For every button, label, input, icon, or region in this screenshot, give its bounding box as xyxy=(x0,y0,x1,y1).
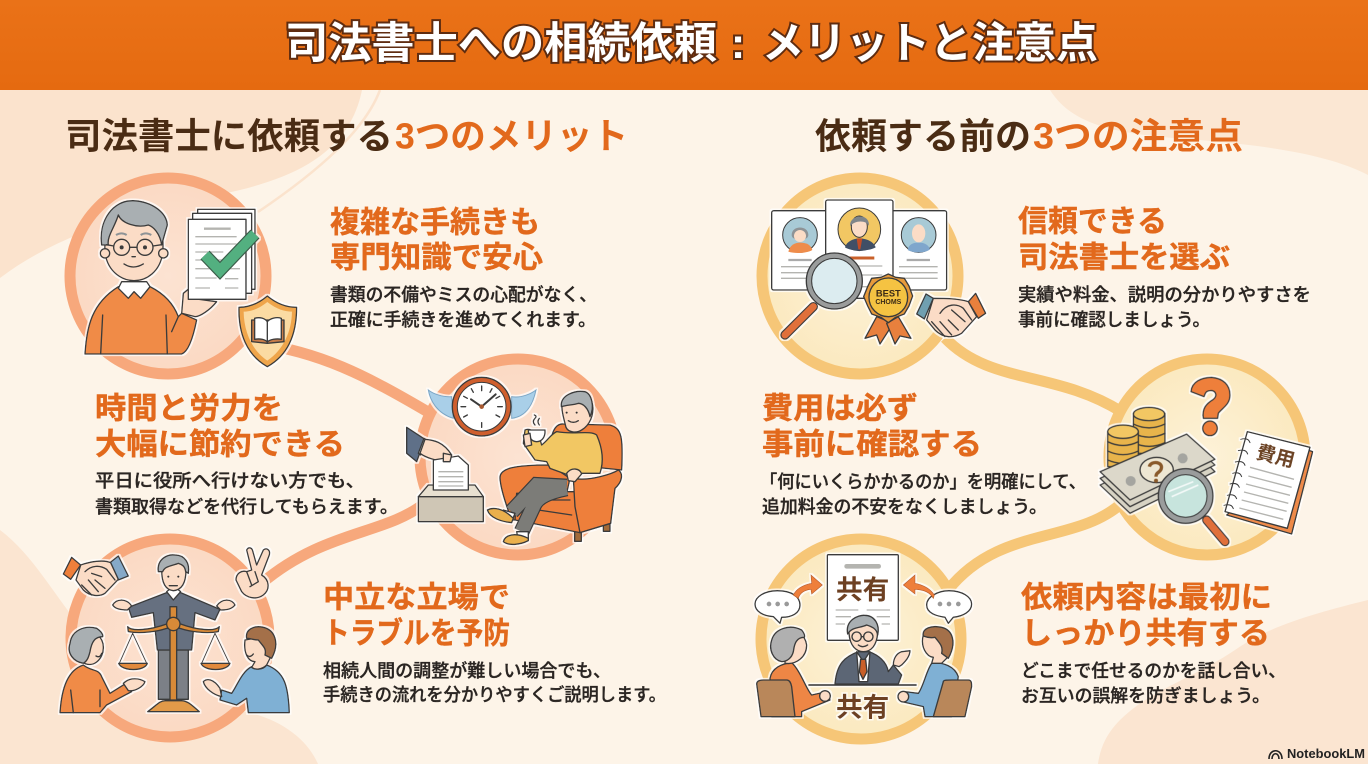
icon: shared document: 共有 xyxy=(836,575,889,605)
heading: merits: 司法書士に依頼する xyxy=(65,116,393,156)
heading: cautions xyxy=(815,116,1243,156)
icon: peace hand xyxy=(236,548,270,598)
table with shared label xyxy=(808,685,917,722)
icon: best choice rosette: BEST xyxy=(876,288,901,298)
icon: woman in orange xyxy=(60,627,145,713)
text: caution 1: 事前に確認しましょう。 xyxy=(1018,310,1210,330)
icon: mediator with scales xyxy=(113,555,235,712)
text: caution 2: 事前に確認する xyxy=(762,428,982,462)
icon: cost notebook xyxy=(1224,432,1313,534)
connector paths right xyxy=(945,338,1122,590)
text: merit 1: 正確に手続きを進めてくれます。 xyxy=(330,310,596,330)
connector paths left xyxy=(255,343,428,583)
text: merit 3: トラブルを予防 xyxy=(323,616,510,650)
panel: caution 2 illustration xyxy=(1100,359,1313,555)
text: caution 1: 実績や料金、説明の分かりやすさを xyxy=(1018,285,1311,305)
text: merit 1: 書類の不備やミスの心配がなく、 xyxy=(330,284,597,305)
text: merit 1 xyxy=(330,206,597,330)
icon: speech bubbles and arrows xyxy=(755,575,972,623)
icon: coin stacks xyxy=(1108,407,1165,467)
title: : xyxy=(731,20,745,68)
text: merit 2 xyxy=(95,392,398,517)
icon: winged clock xyxy=(428,377,536,436)
icon: question mark xyxy=(1191,377,1230,436)
text: caution 2: 追加料金の不安をなくしましょう。 xyxy=(762,497,1047,517)
icon: shield with book xyxy=(239,296,297,367)
text: merit 1: 複雑な手続きも xyxy=(330,206,540,240)
icon: man relaxing in armchair with tea xyxy=(487,391,622,544)
heading: cautions: 3つの注意点 xyxy=(1033,116,1243,156)
text: merit 2: 平日に役所へ行けない方でも、 xyxy=(95,471,365,491)
text: caution 3 xyxy=(1021,582,1286,706)
title: メリットと注意点 xyxy=(762,20,1098,68)
panel: caution 3 illustration xyxy=(755,539,972,739)
heading: merits: 3つのメリット xyxy=(395,116,628,156)
icon: magnifying glass over cash xyxy=(1158,469,1225,542)
text: caution 1: 司法書士を選ぶ xyxy=(1018,242,1230,274)
table with shared label: 共有 xyxy=(836,692,889,722)
heading: merits xyxy=(65,116,628,156)
text: merit 1: 専門知識で安心 xyxy=(330,242,543,274)
icon: handshake xyxy=(917,293,986,337)
heading: cautions: 依頼する前の xyxy=(815,116,1031,156)
icon: banknotes xyxy=(1100,434,1215,513)
text: merit 3: 相続人間の調整が難しい場合でも、 xyxy=(323,660,611,681)
text: caution 1 xyxy=(1018,206,1311,330)
text: caution 2 xyxy=(760,392,1086,517)
icon: shared document xyxy=(827,555,898,640)
icon: advisor in suit xyxy=(835,615,910,684)
title xyxy=(285,20,1098,68)
text: merit 2: 書類取得などを代行してもらえます。 xyxy=(95,497,398,517)
text: caution 2: 費用は必ず xyxy=(762,392,918,426)
text: merit 3: 手続きの流れを分かりやすくご説明します。 xyxy=(323,685,666,705)
panel: caution 1 illustration xyxy=(762,178,986,374)
text: caution 3: 依頼内容は最初に xyxy=(1021,582,1272,614)
icon: cost notebook: 費用 xyxy=(1254,441,1297,472)
panel: merit 3 illustration xyxy=(60,539,289,737)
panel: merit 2 illustration xyxy=(407,359,622,555)
icon: man at table xyxy=(898,627,972,717)
header band xyxy=(0,0,1368,90)
text: caution 3: どこまで任せるのかを話し合い、 xyxy=(1021,661,1286,681)
icon: man in blue xyxy=(203,627,289,713)
icon: candidate profile cards xyxy=(772,200,947,298)
NotebookLM watermark: NotebookLM xyxy=(1287,747,1365,761)
text: caution 2: 「何にいくらかかるのか」を明確にして、 xyxy=(760,472,1086,492)
text: caution 3: お互いの誤解を防ぎましょう。 xyxy=(1021,686,1270,706)
text: caution 1: 信頼できる xyxy=(1018,206,1167,238)
icon: magnifying glass xyxy=(785,253,862,335)
icon: best choice rosette xyxy=(864,274,913,344)
panel: merit 1 illustration xyxy=(70,178,297,374)
icon: best choice rosette: CHOMS xyxy=(875,299,902,306)
text: merit 3 xyxy=(323,582,666,705)
title: 司法書士への相続依頼 xyxy=(285,20,717,68)
icon: stack of documents with check xyxy=(188,209,255,299)
icon: woman at table xyxy=(757,627,830,717)
icon: hand posting document into box xyxy=(407,427,483,522)
text: caution 3: しっかり共有する xyxy=(1021,618,1270,650)
text: merit 3: 中立な立場で xyxy=(323,582,510,614)
text: merit 2: 時間と労力を xyxy=(95,392,283,426)
icon: senior man holding document xyxy=(85,201,217,354)
text: merit 2: 大幅に節約できる xyxy=(95,428,345,462)
icon: handshake xyxy=(63,556,128,596)
